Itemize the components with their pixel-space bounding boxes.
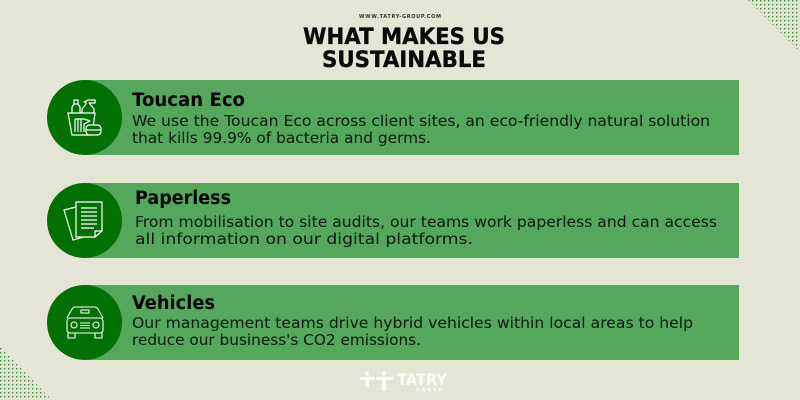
dotted corner: bottom left — [0, 347, 52, 400]
wordmark: TATRY — [397, 370, 447, 389]
heading: Toucan Eco — [132, 90, 245, 111]
panel: Vehicles — [47, 285, 739, 360]
circle: Vehicles icon badge — [47, 285, 122, 360]
icon: logo figures — [360, 372, 393, 391]
icon: paper documents — [64, 202, 102, 240]
description: that kills 99.9% of bacteria and germs. — [132, 129, 431, 147]
dotted corner: top right — [748, 0, 800, 52]
panel: Paperless — [47, 183, 739, 258]
description — [132, 314, 693, 349]
description: Our management teams drive hybrid vehicles within local areas to help — [132, 314, 693, 332]
circle: Paperless icon badge — [47, 183, 122, 258]
title: WHAT MAKES US — [303, 25, 505, 50]
title: SUSTAINABLE — [322, 48, 486, 73]
icon: cleaning products — [68, 100, 101, 135]
website address: WWW.TATRY-GROUP.COM — [359, 14, 441, 20]
heading: Paperless — [135, 188, 231, 209]
description: We use the Toucan Eco across client sites, an eco-friendly natural solution — [132, 112, 710, 130]
subtext: GROUP — [416, 388, 443, 394]
description — [135, 213, 717, 248]
icon: car — [67, 307, 103, 338]
circle: Toucan Eco icon badge — [47, 80, 122, 155]
description — [132, 112, 710, 147]
logo: Tatry Group — [360, 370, 447, 394]
heading: Vehicles — [132, 293, 215, 314]
title — [303, 25, 505, 73]
description: reduce our business's CO2 emissions. — [132, 331, 421, 349]
panel: Toucan Eco — [47, 80, 739, 155]
description: all information on our digital platforms. — [135, 230, 473, 248]
description: From mobilisation to site audits, our teams work paperless and can access — [135, 213, 717, 231]
